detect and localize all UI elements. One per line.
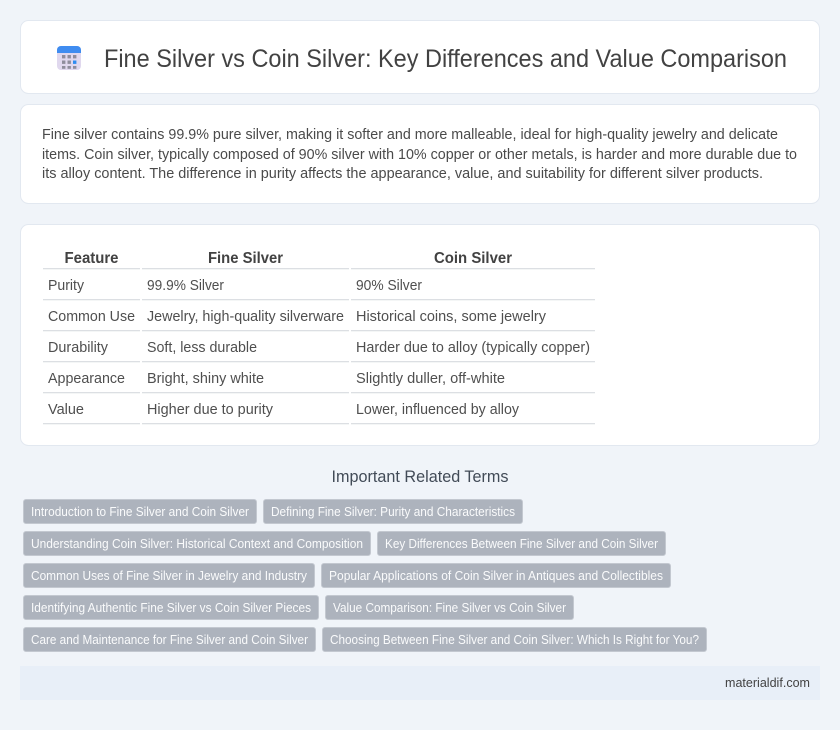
row: value: Higher due to purity bbox=[147, 402, 274, 418]
intro text: its alloy content. The difference in purity affects the appearance, value, and suitability for different silver products. bbox=[42, 165, 763, 182]
tag bbox=[322, 628, 706, 652]
row: purity: Purity bbox=[48, 278, 85, 294]
row: purity: 99.9% Silver bbox=[147, 278, 224, 294]
tag bbox=[378, 532, 666, 556]
tag bbox=[24, 596, 318, 620]
row: common use bbox=[48, 309, 547, 325]
tag bbox=[24, 628, 316, 652]
header panel bbox=[20, 20, 820, 94]
tag: Defining Fine Silver: Purity and Characteristics bbox=[271, 505, 515, 519]
tag: Identifying Authentic Fine Silver vs Coin Silver Pieces bbox=[31, 601, 311, 615]
row: value: Value bbox=[48, 402, 84, 418]
row: common use: Jewelry, high-quality silverware bbox=[147, 309, 344, 325]
table header: Coin Silver bbox=[434, 250, 512, 267]
tag bbox=[24, 500, 256, 524]
table header: Feature bbox=[64, 250, 119, 267]
icon: calendar bbox=[57, 46, 81, 70]
tag bbox=[322, 564, 670, 588]
tag bbox=[326, 596, 574, 620]
tag bbox=[264, 500, 522, 524]
row: appearance bbox=[48, 371, 505, 387]
row: appearance: Slightly duller, off-white bbox=[356, 371, 505, 387]
row: purity bbox=[48, 278, 422, 294]
row: durability: Soft, less durable bbox=[147, 340, 257, 356]
tag bbox=[24, 564, 314, 588]
row: durability bbox=[48, 340, 590, 356]
table header: Fine Silver bbox=[208, 250, 283, 267]
intro text bbox=[42, 126, 797, 182]
row: durability: Harder due to alloy (typically copper) bbox=[356, 340, 590, 356]
row: value bbox=[48, 402, 520, 418]
tag: Key Differences Between Fine Silver and Coin Silver bbox=[385, 537, 658, 551]
tag: Introduction to Fine Silver and Coin Silver bbox=[31, 505, 249, 519]
row: durability: Durability bbox=[48, 340, 109, 356]
panel: comparison table bbox=[20, 224, 820, 446]
tag: Understanding Coin Silver: Historical Context and Composition bbox=[31, 537, 363, 551]
table header bbox=[64, 250, 512, 267]
tag: Common Uses of Fine Silver in Jewelry and Industry bbox=[31, 569, 308, 583]
row: value: Lower, influenced by alloy bbox=[356, 402, 520, 418]
intro text: items. Coin silver, typically composed of 90% silver with 10% copper or other metals, is harder and more durable due to bbox=[42, 146, 797, 163]
row: purity: 90% Silver bbox=[356, 278, 422, 294]
tag: Choosing Between Fine Silver and Coin Silver: Which Is Right for You? bbox=[330, 633, 699, 647]
intro text: Fine silver contains 99.9% pure silver, making it softer and more malleable, ideal for high-quality jewelry and delicate bbox=[42, 126, 778, 143]
title: Fine Silver vs Coin Silver: Key Differences and Value Comparison bbox=[104, 45, 787, 73]
row: common use: Historical coins, some jewelry bbox=[356, 309, 547, 325]
tag bbox=[24, 532, 370, 556]
footer source text: materialdif.com bbox=[725, 675, 810, 690]
panel: introduction bbox=[20, 104, 820, 204]
row: common use: Common Use bbox=[48, 309, 135, 325]
tag: Popular Applications of Coin Silver in Antiques and Collectibles bbox=[329, 569, 663, 583]
heading: related terms: Important Related Terms bbox=[332, 467, 508, 486]
tag: Value Comparison: Fine Silver vs Coin Silver bbox=[333, 601, 566, 615]
row: appearance: Appearance bbox=[48, 371, 125, 387]
tag: Care and Maintenance for Fine Silver and Coin Silver bbox=[31, 633, 308, 647]
related term tags bbox=[24, 500, 706, 652]
footer bbox=[20, 666, 820, 700]
row: appearance: Bright, shiny white bbox=[147, 371, 264, 387]
